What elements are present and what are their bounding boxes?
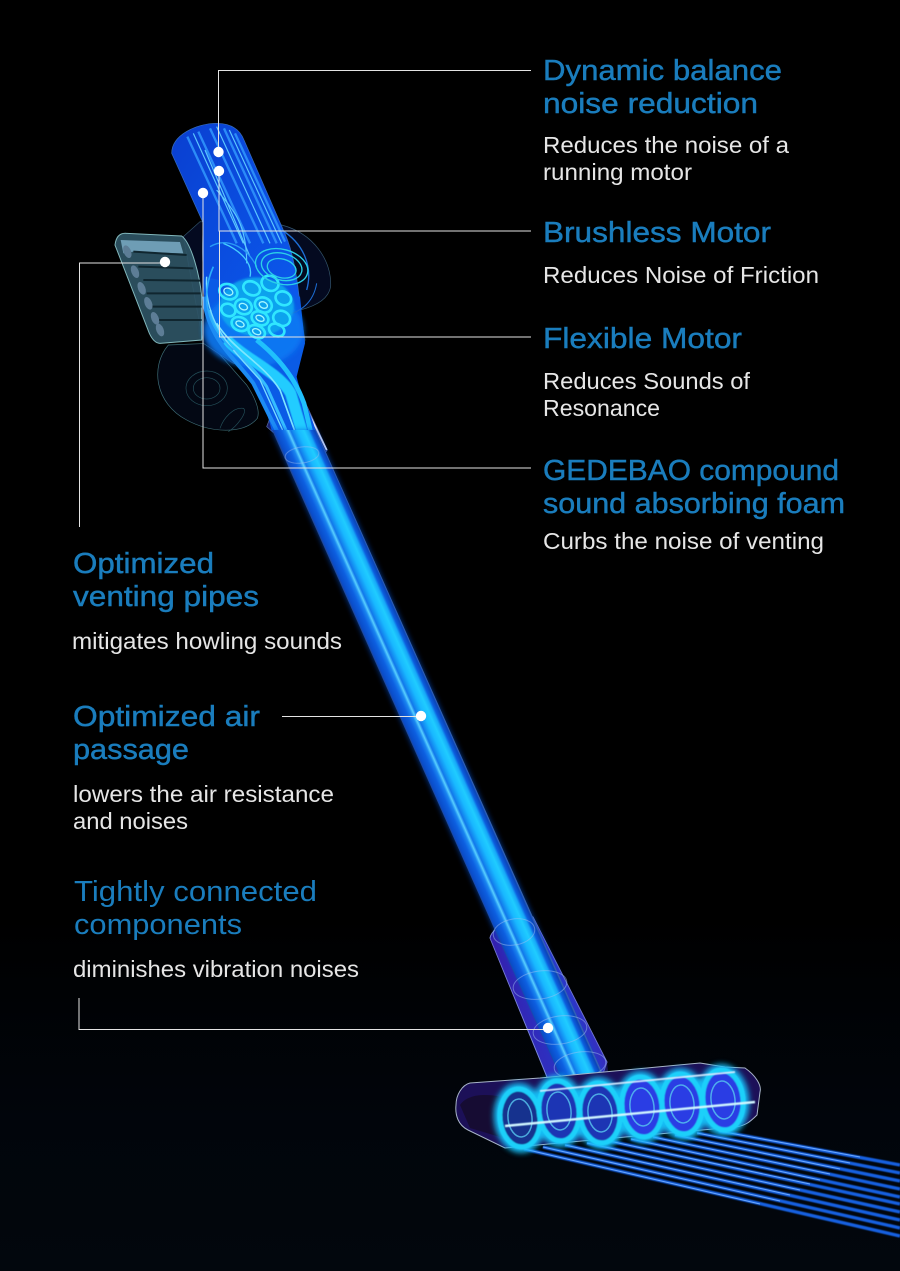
callout: connected components: diminishes vibration noises [73,956,359,982]
motor coil cluster [217,243,312,341]
shaft collar [490,916,607,1082]
callout: dynamic balance noise reduction: Dynamic balance [543,55,782,87]
motor housing [183,222,331,468]
handle tube [172,123,301,350]
callout: flexible motor: Reduces Sounds of [543,368,751,394]
callout: brushless motor: Reduces Noise of Friction [543,262,819,288]
callout: venting pipes: Optimized [73,548,214,580]
callout: compound foam: GEDEBAO compound [543,455,839,487]
callout: air passage: and noises [73,808,188,834]
callout: dynamic balance noise reduction: noise reduction [543,88,758,120]
brush rollers [497,1068,746,1149]
dust bin [158,343,258,432]
callout: air passage: lowers the air resistance [73,781,334,807]
callout: venting pipes [72,257,342,654]
callout: connected components: Tightly connected [74,876,317,908]
callout: flexible motor: Flexible Motor [543,323,742,355]
callout: venting pipes: venting pipes [73,581,259,613]
callout: dynamic balance noise reduction: running motor [543,159,692,185]
callout: connected components: components [74,909,242,941]
callout: flexible motor [220,231,751,421]
callout: dynamic balance noise reduction: Reduces the noise of a [543,132,789,158]
callout: compound foam: sound absorbing foam [543,488,845,520]
callout: brushless motor: Brushless Motor [543,217,771,249]
floor brush head [456,1063,760,1149]
callout: compound foam [198,188,845,554]
callout: connected components [73,876,553,1033]
callout: flexible motor: Resonance [543,395,660,421]
callout: air passage: Optimized air [73,701,260,733]
air flow into shaft [203,230,317,432]
callout: venting pipes: mitigates howling sounds [72,628,342,654]
callout: air passage [73,701,426,834]
callout: brushless motor [214,166,819,288]
callout: dynamic balance noise reduction [213,55,789,185]
callout: compound foam: Curbs the noise of venting [543,528,824,554]
floor light beams [524,1131,900,1236]
vacuum shaft [272,430,610,1090]
battery pack [115,233,202,343]
callout: air passage: passage [73,734,189,766]
motor handle assembly [115,123,331,468]
